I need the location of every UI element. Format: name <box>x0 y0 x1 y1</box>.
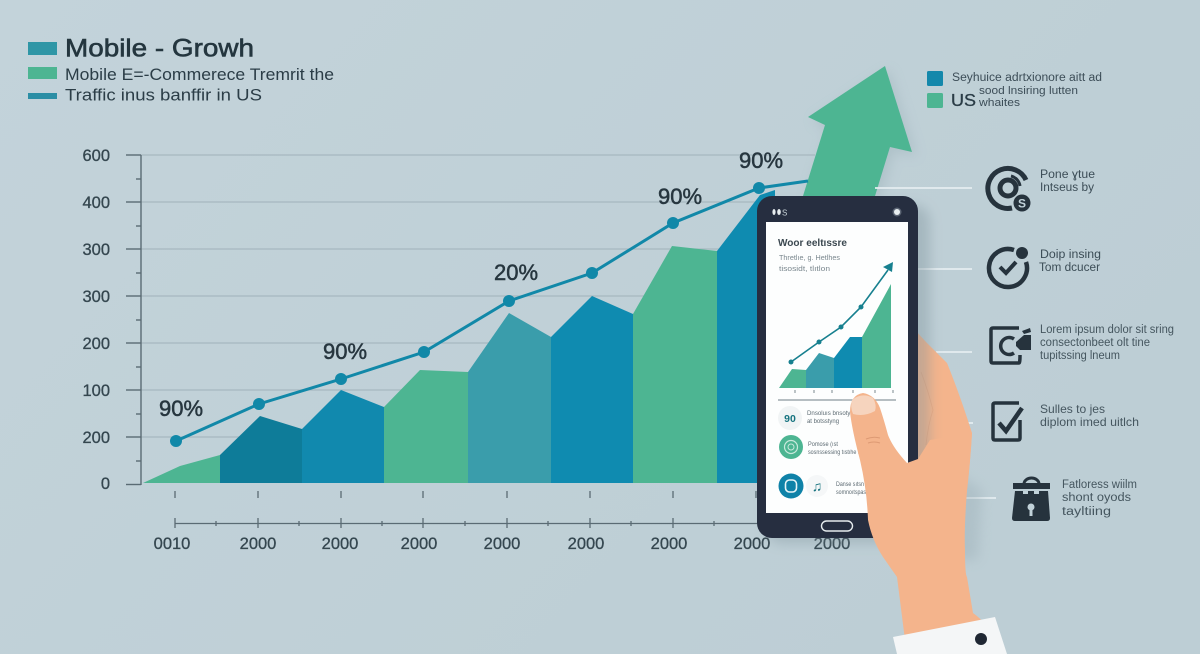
icon row: checklist: diplom imed uitlch <box>1040 415 1139 429</box>
phone home button <box>822 521 852 531</box>
icon row: clock check: Doip insing <box>1040 249 1101 261</box>
phone list row two: sosnssessing tıstıhe ıs <box>808 449 863 456</box>
top right legend: US <box>951 90 976 110</box>
icon row: framed C with tag: tupitssing lneum <box>1040 350 1120 362</box>
phone list row two <box>779 435 863 459</box>
percentage labels: 20% <box>494 260 538 285</box>
chart: y axis, grid and labels: 400 <box>82 194 110 212</box>
percentage labels <box>159 148 783 421</box>
percentage labels: 90% <box>323 339 367 364</box>
area chart <box>143 190 775 483</box>
icon row: target with dollar badge: Intseus by <box>1040 182 1094 194</box>
trend line with markers <box>170 181 808 447</box>
chart: y axis, grid and labels: 300 <box>82 288 110 306</box>
icon row: clock check: Tom dcucer <box>1039 262 1100 274</box>
top right legend: whaites <box>978 97 1021 109</box>
chart: y axis, grid and labels: 100 <box>82 382 110 400</box>
hand: thumb and wrist over phone <box>850 393 990 640</box>
shirt cuff <box>893 617 1007 654</box>
icon row: locked bag <box>1012 478 1137 521</box>
phone list row three: Danse sıtsn <box>836 481 864 488</box>
chart: y axis, grid and labels <box>82 147 815 493</box>
icon row: locked bag: Fatloress wiilm <box>1062 479 1137 491</box>
phone status bar: S <box>782 208 787 218</box>
header legend and title: Mobile E=-Commerece Tremrit the <box>65 66 334 84</box>
growth arrow <box>803 66 916 200</box>
phone mini chart <box>778 262 896 400</box>
top right legend <box>927 71 1102 110</box>
x axis with year labels: 0010 <box>154 535 190 553</box>
phone list row three: ♫ <box>812 478 822 494</box>
icon row: framed C with tag: Lorem ipsum dolor sit sring <box>1040 324 1174 336</box>
icon row: framed C with tag: consectonbeet olt tine <box>1040 337 1150 349</box>
icon row: target with dollar badge: S <box>1018 196 1026 210</box>
x axis with year labels: 2000 <box>568 535 604 553</box>
icon row: target with dollar badge <box>988 168 1095 212</box>
phone list row one: Dnsoluıs bnsotyıng <box>807 410 859 417</box>
top right legend: Seyhuice adrtxionore aitt ad <box>952 72 1102 84</box>
chart: y axis, grid and labels: 300 <box>82 241 110 259</box>
percentage labels: 90% <box>739 148 783 173</box>
phone list row one <box>778 406 859 430</box>
phone status bar <box>772 208 902 218</box>
phone screen <box>766 222 908 513</box>
phone screen heading <box>778 238 847 273</box>
header legend and title: Traffic inus banffir in US <box>65 86 262 104</box>
top right legend: sood lnsiring lutten <box>979 85 1078 97</box>
x axis with year labels: 2000 <box>814 535 850 553</box>
percentage labels: 90% <box>658 184 702 209</box>
chart: y axis, grid and labels: 600 <box>82 147 110 165</box>
phone list row one: at botsstyng <box>807 418 839 425</box>
hand: back of palm behind phone <box>900 330 982 560</box>
phone list row one: 90 <box>784 413 796 425</box>
header legend and title <box>28 34 334 104</box>
chart: y axis, grid and labels: 0 <box>101 475 110 493</box>
x axis with year labels: 2000 <box>734 535 770 553</box>
x axis with year labels: 2000 <box>240 535 276 553</box>
icon row: locked bag: tayltiing <box>1062 506 1111 518</box>
chart: y axis, grid and labels: 200 <box>82 429 110 447</box>
percentage labels: 90% <box>159 396 203 421</box>
x axis with year labels: 2000 <box>401 535 437 553</box>
icon row: target with dollar badge: Pone ɣtue <box>1040 169 1095 181</box>
x axis with year labels <box>154 491 850 553</box>
phone list row two: Pomose (ıst <box>808 441 838 448</box>
connector lines <box>875 188 996 498</box>
icon row: checklist: Sulles to jes <box>1040 402 1105 416</box>
icon row: framed C with tag <box>991 324 1174 363</box>
phone screen heading: Thretlıe, g. Hetlhes <box>779 253 840 262</box>
phone <box>757 196 930 543</box>
icon row: clock check <box>989 247 1101 287</box>
x axis with year labels: 2000 <box>484 535 520 553</box>
phone list row three: somnoıtspas <box>836 489 867 496</box>
chart: y axis, grid and labels: 200 <box>82 335 110 353</box>
icon row: locked bag: shont oyods <box>1062 492 1131 504</box>
phone screen heading: Woor eeltıssre <box>778 238 847 249</box>
phone screen heading: tisosidt, tlıtlon <box>779 264 830 273</box>
phone list row three <box>778 474 867 498</box>
icon row: checklist <box>993 402 1139 440</box>
header legend and title: Mobile - Growh <box>65 34 254 62</box>
x axis with year labels: 2000 <box>322 535 358 553</box>
x axis with year labels: 2000 <box>651 535 687 553</box>
